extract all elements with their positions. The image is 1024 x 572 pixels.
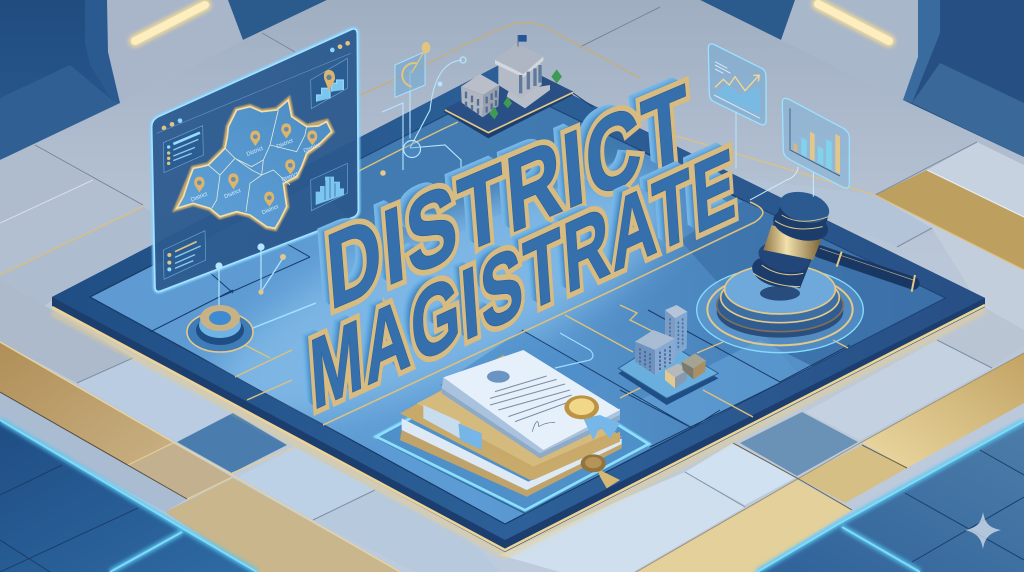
map pins [194, 123, 317, 207]
district labels: District [261, 204, 280, 216]
trees [489, 69, 562, 119]
title line: District: DISTRICT [322, 61, 695, 333]
platform grid lines [150, 93, 850, 447]
bottom left dark tile glow [0, 420, 257, 572]
upper folder [417, 390, 620, 480]
gold and blue circuit lines [235, 57, 848, 425]
icon: sparkle watermark [965, 512, 1001, 549]
map shape [177, 100, 332, 228]
icon: gavel on sound block [697, 187, 915, 353]
back wall right [700, 0, 1024, 160]
district labels: District [276, 138, 295, 150]
bottom right dark tile glow [757, 421, 1024, 572]
district labels [190, 138, 322, 216]
district labels: District [303, 142, 322, 155]
district labels: District [246, 146, 265, 158]
panel: line chart [708, 44, 766, 168]
panel: bar chart [750, 98, 849, 200]
legend box bottom left [163, 231, 206, 279]
courthouse on base [443, 35, 573, 138]
ceiling light left [135, 5, 205, 41]
gavel head [749, 187, 832, 292]
bottom folder [400, 355, 622, 497]
platform inner tiles [197, 107, 944, 437]
back wall left [0, 0, 327, 170]
city icon top right [311, 58, 347, 109]
side office block [461, 74, 499, 117]
district borders [208, 110, 307, 212]
city icon bottom right [311, 163, 347, 211]
icon: office buildings [618, 305, 718, 405]
top document [442, 350, 620, 458]
lower wax seal [581, 454, 620, 488]
district labels: District [224, 188, 242, 200]
legend box top left [163, 126, 203, 173]
gavel handle [820, 248, 915, 292]
panel: district map [152, 29, 358, 291]
sound block tiers [717, 265, 843, 338]
panel connectors [216, 244, 286, 310]
title line: Magistrate: MAGISTRATE [307, 125, 740, 431]
platform [52, 62, 985, 555]
icon: document stack [377, 350, 648, 514]
courthouse building [495, 35, 550, 108]
icon: left pedestal node [187, 305, 253, 352]
district labels: District [190, 191, 209, 204]
district labels: District [281, 171, 300, 184]
small node icon [395, 42, 430, 138]
ribbon and gold seal [564, 395, 620, 440]
ceiling light right [818, 4, 889, 41]
window dots [162, 41, 350, 130]
